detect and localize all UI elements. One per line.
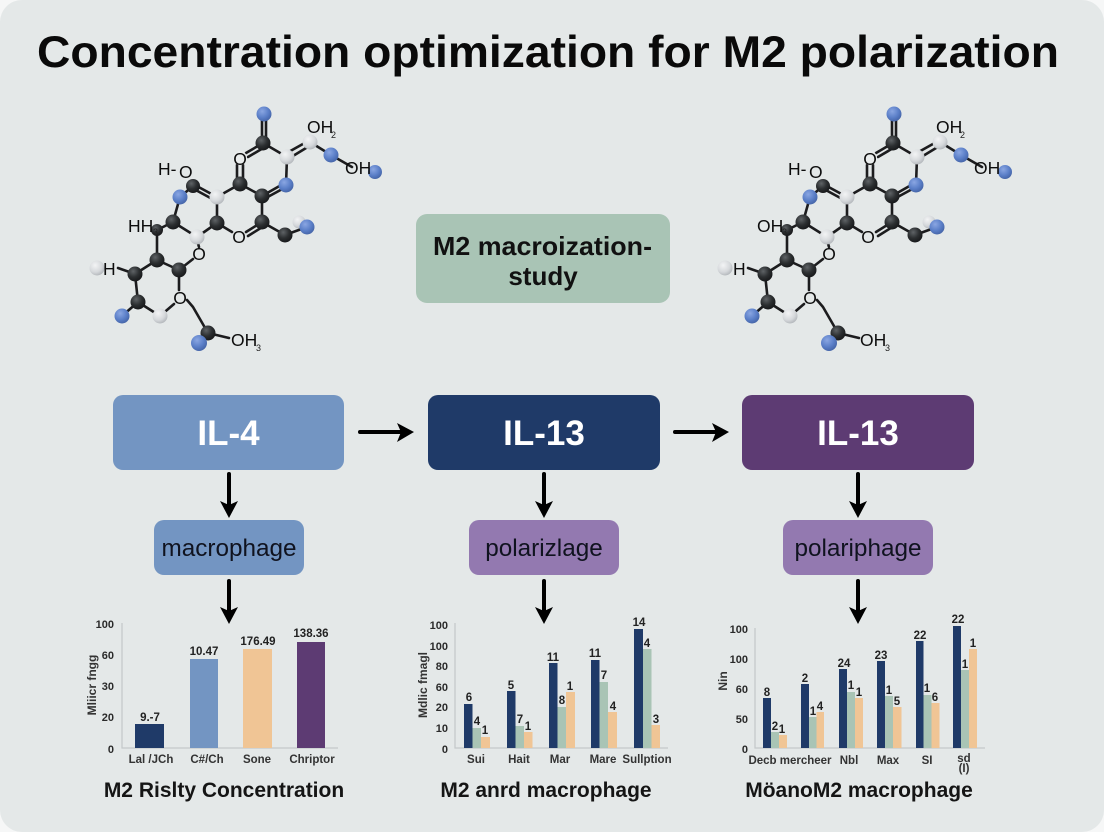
center study box: study — [508, 261, 578, 291]
value labels: 3 — [653, 714, 659, 726]
atom labels: 2 — [331, 130, 336, 140]
y axis labels: 100 — [430, 641, 448, 653]
y axis labels: 10 — [436, 723, 448, 735]
bars — [763, 626, 977, 748]
value labels: 138.36 — [293, 628, 329, 640]
category labels: Chriptor — [289, 754, 335, 766]
y axis labels: 30 — [102, 681, 114, 693]
atom labels: O — [803, 288, 817, 308]
caption: middle chart: M2 anrd macrophage — [440, 779, 652, 802]
value labels: 1 — [962, 659, 969, 671]
title: Concentration optimization for M2 polarization — [37, 28, 1059, 77]
value labels: 4 — [817, 701, 824, 713]
value labels: 4 — [644, 638, 651, 650]
category labels: SI — [922, 755, 932, 767]
box: IL-13 middle: IL-13 — [503, 414, 585, 453]
value labels: 24 — [838, 658, 851, 670]
atom labels: O — [232, 227, 246, 247]
atom labels — [733, 117, 1000, 353]
category labels: Sullption — [622, 754, 672, 766]
value labels: 1 — [567, 681, 574, 693]
atom labels: OH — [974, 158, 1000, 178]
atom labels: O — [861, 227, 875, 247]
y axis labels — [716, 624, 748, 756]
value labels: 4 — [610, 701, 617, 713]
value labels: 1 — [848, 680, 855, 692]
center study box — [416, 214, 670, 303]
box: polariphage — [783, 520, 933, 575]
atom labels: H- — [788, 159, 807, 179]
value labels: 7 — [517, 714, 523, 726]
category labels — [748, 753, 971, 775]
value labels: 1 — [525, 721, 532, 733]
atom labels: OH — [231, 330, 257, 350]
atom labels — [103, 117, 371, 353]
value labels: 11 — [547, 652, 560, 664]
value labels — [466, 617, 659, 737]
caption: left chart: M2 Rislty Concentration — [104, 779, 344, 802]
value labels: 14 — [633, 617, 646, 629]
value labels: 2 — [772, 721, 778, 733]
value labels: 5 — [508, 680, 515, 692]
category labels: Decb mercheer — [748, 755, 832, 767]
atom labels: H — [103, 259, 116, 279]
box: IL-13 right: IL-13 — [817, 414, 899, 453]
atom labels: O — [179, 162, 193, 182]
value labels: 6 — [466, 692, 472, 704]
value labels: 9.-7 — [140, 712, 160, 724]
y axis labels: Mliicr fngg — [85, 655, 99, 715]
atom labels: O — [809, 162, 823, 182]
atom labels: OH — [757, 216, 783, 236]
y axis labels — [416, 620, 448, 756]
value labels: 1 — [856, 687, 863, 699]
value labels: 23 — [875, 650, 887, 662]
arrow: IL-4 to macrophage — [220, 474, 238, 518]
y axis labels: Mdlic fmagl — [416, 652, 430, 718]
y axis labels: 60 — [436, 682, 448, 694]
category labels: Mar — [550, 754, 571, 766]
bar chart: middle — [416, 617, 672, 766]
atom labels: OH — [345, 158, 371, 178]
value labels: 22 — [914, 630, 926, 642]
arrow: polarizlage to chart — [535, 581, 553, 624]
value labels: 8 — [559, 695, 566, 707]
category labels: Max — [877, 755, 900, 767]
box: polarizlage: polarizlage — [485, 535, 603, 562]
atom labels: H — [733, 259, 746, 279]
y axis labels: 0 — [742, 744, 748, 756]
box: IL-13 middle — [428, 395, 660, 470]
atom labels: 2 — [960, 130, 965, 140]
value labels: 4 — [474, 716, 481, 728]
y axis labels: 20 — [102, 712, 114, 724]
bars — [135, 642, 325, 748]
arrow: IL-13 to polariphage — [849, 474, 867, 518]
category labels: (I) — [959, 763, 970, 775]
arrow: IL-4 to IL-13 — [360, 423, 414, 442]
category labels — [129, 754, 335, 766]
atom labels: 3 — [153, 227, 158, 237]
atom labels: O — [192, 244, 206, 264]
y axis labels: 0 — [442, 744, 448, 756]
atom labels: 3 — [782, 227, 787, 237]
value labels: 10.47 — [190, 646, 218, 658]
box: IL-4 — [113, 395, 344, 470]
atom labels: 3 — [256, 343, 261, 353]
value labels: 6 — [932, 692, 938, 704]
y axis labels: 80 — [436, 661, 448, 673]
y axis labels: 100 — [730, 654, 748, 666]
box: IL-13 right — [742, 395, 974, 470]
y axis labels: Nin — [716, 671, 730, 691]
atom labels: O — [822, 244, 836, 264]
value labels: 8 — [764, 687, 771, 699]
y axis labels: 20 — [436, 702, 448, 714]
value labels: 1 — [924, 683, 931, 695]
box: IL-4: IL-4 — [197, 414, 260, 453]
value labels: 1 — [779, 724, 786, 736]
atom labels: OH — [936, 117, 962, 137]
atom labels: O — [173, 288, 187, 308]
atom labels: OH — [307, 117, 333, 137]
atom labels: O — [863, 149, 877, 169]
atom labels: O — [233, 149, 247, 169]
y axis labels: 100 — [730, 624, 748, 636]
arrow: IL-13 to IL-13 — [675, 423, 729, 442]
bar chart: left — [85, 619, 338, 766]
atoms — [90, 106, 382, 351]
category labels: Mare — [590, 754, 616, 766]
category labels: C#/Ch — [190, 754, 224, 766]
atom labels: HH — [128, 216, 153, 236]
category labels: Hait — [508, 754, 530, 766]
y axis labels — [85, 619, 114, 756]
y axis labels: 60 — [102, 650, 114, 662]
value labels: 2 — [802, 673, 808, 685]
arrow: IL-13 to polarizlage — [535, 474, 553, 518]
bar chart: right — [716, 614, 985, 775]
value labels — [764, 614, 977, 736]
caption: right chart: MöanoM2 macrophage — [745, 779, 973, 802]
category labels: sd — [957, 753, 971, 765]
center study box: M2 macroization- — [433, 231, 652, 261]
value labels: 5 — [894, 696, 901, 708]
atoms — [718, 106, 1012, 351]
category labels: Sui — [467, 754, 485, 766]
y axis labels: 50 — [736, 714, 748, 726]
box: macrophage — [154, 520, 304, 575]
category labels — [467, 754, 672, 766]
atom labels: OH — [860, 330, 886, 350]
value labels: 22 — [952, 614, 964, 626]
y axis labels: 60 — [736, 684, 748, 696]
molecule: right — [718, 106, 1012, 353]
box: polariphage: polariphage — [794, 535, 922, 562]
y axis labels: 100 — [96, 619, 114, 631]
box: polarizlage — [469, 520, 619, 575]
box: macrophage: macrophage — [161, 535, 297, 562]
category labels: Sone — [243, 754, 271, 766]
value labels: 7 — [601, 670, 607, 682]
arrow: macrophage to chart — [220, 581, 238, 624]
molecule: left — [90, 106, 382, 353]
category labels: Lal /JCh — [129, 754, 173, 766]
bars — [464, 629, 660, 748]
value labels: 1 — [970, 638, 977, 650]
atom labels: H- — [158, 159, 177, 179]
value labels: 1 — [886, 685, 893, 697]
value labels: 1 — [482, 725, 489, 737]
value labels: 1 — [810, 706, 817, 718]
y axis labels: 100 — [430, 620, 448, 632]
atom labels: 3 — [885, 343, 890, 353]
category labels: Nbl — [840, 755, 858, 767]
y axis labels: 0 — [108, 744, 114, 756]
value labels — [140, 628, 329, 724]
arrow: polariphage to chart — [849, 581, 867, 624]
value labels: 11 — [589, 648, 602, 660]
value labels: 176.49 — [240, 636, 276, 648]
